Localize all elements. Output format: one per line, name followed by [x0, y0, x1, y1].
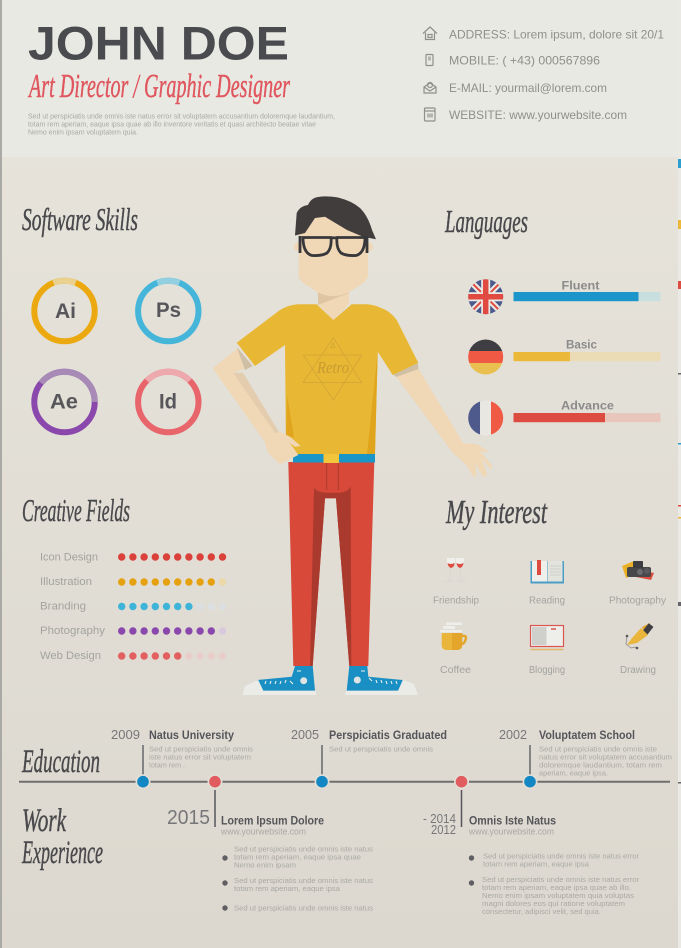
node: 2009 education: totam rem .	[149, 760, 185, 770]
belt	[293, 454, 375, 463]
node: 2002 education: doloremque laudantium, totam rem	[539, 760, 662, 770]
node: 2015 work: Sed ut perspiciatis unde omnis iste natus	[234, 844, 373, 854]
mobile: MOBILE: ( +43) 000567896	[449, 54, 600, 68]
row: icon design	[40, 552, 226, 564]
node: 2009 education	[111, 728, 253, 789]
character illustration	[213, 196, 493, 695]
node: 2002 education: aperiam, eaque ipsa.	[539, 768, 608, 778]
row: icon design: Icon Design	[40, 552, 98, 564]
node: 2014-2012 work: Sed ut perspiciatis unde omnis iste natus error	[482, 875, 640, 884]
bar: advance: Advance	[561, 400, 614, 412]
node: 2015 work: Lorem Ipsum Dolore	[221, 816, 324, 828]
node: 2015 work: Sed ut perspiciatis unde omnis iste natus	[234, 904, 373, 912]
node: 2015 work: www.yourwebsite.com	[220, 826, 306, 836]
icon: address house	[423, 27, 437, 40]
label: blogging: Blogging	[529, 665, 565, 676]
label: friendship: Friendship	[433, 596, 479, 606]
node: 2009 education: iste natus error sit voluptatem	[149, 752, 251, 762]
node: 2014-2012 work: 2012	[431, 822, 456, 837]
node: 2015 work: totam rem aperiam, eaque ipsa	[234, 884, 341, 893]
skill ring: Id: Id	[159, 390, 177, 414]
right arm and hand	[393, 363, 493, 477]
flag: united kingdom	[468, 279, 504, 315]
row: branding	[40, 600, 226, 612]
node: 2014-2012 work: totam rem aperiam, eaque ipsa	[483, 860, 590, 868]
node: 2009 education: Sed ut perspiciatis unde omnis	[149, 744, 253, 754]
node: 2014-2012 work: Omnis Iste Natus	[469, 816, 556, 828]
heading: creative fields: Creative Fields	[22, 492, 130, 528]
heading: software skills: Software Skills	[22, 201, 138, 237]
node: 2014-2012 work: magni dolores eos qui ratione voluptatem	[482, 899, 625, 908]
header: name and title	[28, 18, 335, 136]
icon: email envelope	[424, 82, 436, 93]
skill ring: Ps	[138, 281, 198, 341]
left sneaker	[243, 666, 316, 695]
icon: pen tool	[626, 623, 653, 649]
website: WEBSITE: www.yourwebsite.com	[449, 108, 627, 122]
row: web design	[40, 650, 226, 662]
icon: mobile phone	[426, 54, 433, 66]
heading: languages: Languages	[444, 203, 528, 239]
intro paragraph: totam rem aperiam, eaque ipsa quae ab illo inventore veritatis et quasi architecto beatae vitae	[28, 121, 316, 128]
panel: languages	[444, 203, 660, 436]
row: illustration	[40, 576, 226, 588]
node: 2002 education: natus error sit voluptatem accusantium	[539, 752, 672, 762]
skill ring: Ps: Ps	[156, 299, 181, 322]
node: 2005 education: 2005	[291, 728, 319, 742]
node: 2014-2012 work: www.yourwebsite.com	[468, 826, 554, 836]
bar: basic: Basic	[566, 340, 598, 352]
skill ring: Ae	[34, 372, 95, 432]
bar: advance	[514, 400, 660, 422]
node: 2009 education: Natus University	[149, 730, 235, 742]
label: coffee: Coffee	[440, 665, 471, 676]
job title: Art Director / Graphic Designer	[28, 68, 290, 105]
bar: fluent: Fluent	[562, 280, 600, 292]
timeline: education and work experience	[19, 728, 672, 916]
heading: education: Education	[21, 744, 100, 780]
row: illustration: Illustration	[40, 576, 92, 588]
icon: website	[424, 108, 435, 121]
head	[294, 212, 373, 296]
bar: basic	[514, 340, 660, 361]
node: 2015 work: Sed ut perspiciatis unde omnis iste natus	[234, 876, 373, 885]
node: 2005 education: Perspiciatis Graduated	[329, 730, 447, 742]
row: branding: Branding	[40, 600, 86, 612]
node: 2002 education	[499, 728, 672, 789]
icon: blog layout	[530, 626, 564, 650]
email: E-MAIL: yourmail@lorem.com	[449, 81, 607, 95]
node: 2015 work: 2015	[167, 807, 210, 829]
timeline axis	[19, 781, 670, 783]
intro paragraph: Sed ut perspiciatis unde omnis iste natus error sit voluptatem accusantium doloremque laudantium,	[28, 113, 335, 120]
intro paragraph: Nemo enim ipsam voluptatem quia.	[28, 129, 138, 136]
row: photography: Photography	[40, 625, 106, 637]
flag: germany	[468, 339, 504, 376]
shirt logo: retro: Retro	[316, 358, 349, 377]
panel: software skills	[22, 201, 198, 432]
right sneaker	[345, 666, 418, 695]
label: drawing: Drawing	[620, 665, 656, 676]
panel: creative fields	[22, 492, 226, 662]
node: 2014-2012 work: - 2014	[423, 811, 456, 826]
node: 2014-2012 work: consectetur, adipisci velit, sed quia.	[482, 907, 601, 916]
node: 2014-2012 work: Sed ut perspiciatis unde omnis iste natus error	[483, 852, 640, 860]
icon: coffee cup	[440, 622, 466, 650]
skill ring: Id	[138, 372, 198, 432]
left arm	[213, 347, 280, 447]
bar: fluent	[514, 280, 660, 301]
node: 2002 education: Voluptatem School	[539, 730, 635, 742]
node: 2014-2012 work: totam rem aperiam, eaque ipsa quae ab illo.	[482, 883, 631, 892]
trousers	[288, 462, 374, 666]
node: 2002 education: Sed ut perspiciatis unde omnis iste	[539, 744, 657, 754]
icon: wine glasses	[444, 558, 466, 582]
node: 2015 work: Nemo enim ipsam	[234, 860, 296, 870]
left hand on hip	[265, 432, 301, 464]
node: 2005 education	[291, 728, 447, 789]
heading: my interest: My Interest	[445, 494, 548, 531]
contact details	[423, 27, 664, 122]
node: 2014-2012 work: Nemo enim ipsam voluptatem quia voluptas	[482, 891, 634, 900]
heading: work experience: Work	[22, 803, 67, 839]
t-shirt	[237, 304, 418, 454]
hair	[295, 196, 376, 239]
node: 2014-2012 work	[423, 774, 640, 916]
neck	[318, 290, 349, 320]
panel: my interest	[433, 494, 666, 676]
skill ring: Ae: Ae	[50, 390, 78, 414]
name: JOHN DOE	[28, 18, 289, 70]
skill ring: Ai	[34, 281, 95, 341]
node: 2015 work	[167, 774, 373, 912]
node: 2005 education: Sed ut perspiciatis unde omnis	[329, 744, 433, 754]
node: 2015 work: totam rem aperiam, eaque ipsa quae	[234, 852, 361, 862]
node: 2009 education: 2009	[111, 728, 140, 742]
node: 2002 education: 2002	[499, 728, 527, 742]
row: photography	[40, 625, 226, 637]
label: reading: Reading	[529, 596, 565, 606]
icon: book	[530, 560, 564, 584]
address: ADDRESS: Lorem ipsum, dolore sit 20/1	[449, 28, 664, 42]
heading: work experience	[21, 803, 103, 871]
row: web design: Web Design	[40, 650, 101, 662]
skill ring: Ai: Ai	[55, 300, 76, 323]
shirt logo: retro	[303, 338, 362, 400]
flag: france	[468, 400, 504, 436]
intro paragraph	[28, 113, 335, 136]
glasses	[300, 236, 367, 256]
label: photography: Photography	[609, 596, 666, 606]
icon: camera and photos	[622, 561, 654, 580]
heading: work experience: Experience	[21, 835, 103, 871]
